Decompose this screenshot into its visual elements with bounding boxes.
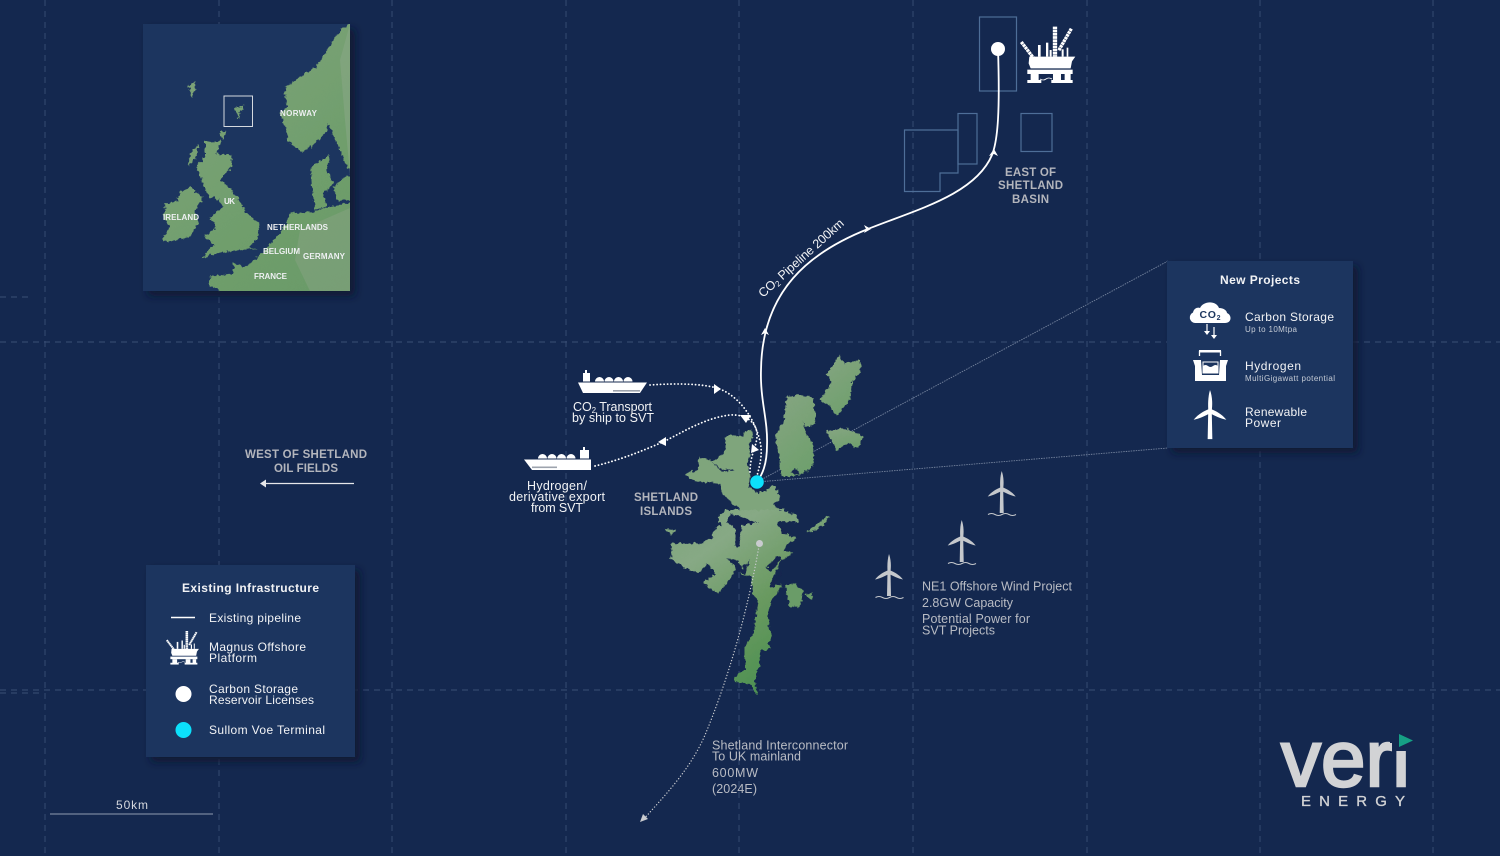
- carbon storage reservoir point: [991, 42, 1005, 56]
- label: East of Shetland Basin: BASIN: [1012, 194, 1049, 206]
- inset country labels: IRELAND: [163, 213, 199, 222]
- ship: hydrogen export: [524, 447, 591, 470]
- inset country labels: FRANCE: [254, 272, 288, 281]
- legend: reservoir licences: [176, 682, 314, 707]
- legend: reservoir licences: Carbon Storage: [209, 682, 298, 696]
- label: West of Shetland oil fields: WEST OF SHETLAND: [245, 449, 367, 461]
- inset country labels: [163, 109, 346, 281]
- interconnector route: [640, 540, 763, 822]
- licence blocks: [904, 17, 1052, 192]
- label: hydrogen export: Hydrogen/: [527, 479, 588, 493]
- route arrowheads: [658, 384, 759, 453]
- text: renewable power: [1245, 405, 1307, 430]
- label: CO2 pipeline: 2: [773, 279, 783, 289]
- label: West of Shetland oil fields: [245, 449, 367, 475]
- ship: CO2 transport: [578, 370, 647, 393]
- label: NE1 offshore wind: 2.8GW Capacity: [922, 596, 1014, 610]
- legend: reservoir licences: Reservoir Licenses: [209, 693, 314, 707]
- label: CO2 transport: Transport: [596, 400, 653, 414]
- label: Shetland Islands: ISLANDS: [640, 506, 692, 518]
- icon: CO2 cloud: CO: [1200, 309, 1216, 321]
- label: CO2 transport: [572, 400, 654, 425]
- inset land: [162, 20, 357, 293]
- label: West of Shetland oil fields: OIL FIELDS: [274, 463, 338, 475]
- legend: platform: Magnus Offshore: [209, 640, 306, 654]
- label: hydrogen export: from SVT: [531, 501, 583, 515]
- label: interconnector: (2024E): [712, 782, 757, 796]
- label: CO2 pipeline: Pipeline 200km: [773, 216, 847, 285]
- label: Shetland Islands: [634, 492, 698, 518]
- panel: inset locator map: [143, 20, 357, 293]
- label: NE1 offshore wind: [922, 580, 1073, 638]
- text: carbon storage: [1245, 310, 1334, 334]
- legend: platform: [167, 631, 306, 665]
- label: hydrogen export: [509, 479, 606, 515]
- legend heading: Existing Infrastructure: [182, 581, 319, 595]
- label: East of Shetland Basin: [998, 167, 1063, 206]
- inset country labels: GERMANY: [303, 252, 346, 261]
- scale bar: 50km: [116, 798, 148, 812]
- icon: wind turbine: [1194, 390, 1226, 439]
- label: interconnector: [712, 738, 848, 796]
- legend: terminal: [176, 722, 325, 738]
- label: NE1 offshore wind: SVT Projects: [922, 624, 995, 638]
- text: hydrogen: Hydrogen: [1245, 359, 1301, 373]
- logo: Veri Energy: ENERGY: [1301, 793, 1405, 810]
- text: hydrogen: MultiGigawatt potential: [1245, 374, 1335, 383]
- inset focus box: [224, 96, 252, 126]
- icon: CO2 cloud: [1190, 302, 1231, 339]
- label: hydrogen export: derivative export: [509, 490, 606, 504]
- logo: Veri Energy: veri: [1281, 714, 1410, 803]
- connector lines from terminal to new projects panel: [757, 261, 1168, 482]
- legend: terminal: Sullom Voe Terminal: [209, 723, 325, 737]
- label: interconnector: 600MW: [712, 766, 758, 780]
- label: NE1 offshore wind: Potential Power for: [922, 612, 1030, 626]
- shipping routes: [595, 384, 761, 476]
- panel: existing infrastructure legend: [146, 565, 355, 757]
- CO2 pipeline: [757, 49, 999, 482]
- inset country labels: NETHERLANDS: [267, 223, 329, 232]
- label: Shetland Islands: SHETLAND: [634, 492, 698, 504]
- label: CO2 transport: by ship to SVT: [572, 411, 654, 425]
- inset country labels: UK: [224, 197, 235, 206]
- inset country labels: NORWAY: [280, 109, 318, 118]
- text: renewable power: Power: [1245, 416, 1281, 430]
- label: NE1 offshore wind: NE1 Offshore Wind Project: [922, 580, 1073, 594]
- map: Shetland Islands: [664, 355, 863, 695]
- label: CO2 transport: CO: [573, 400, 592, 414]
- legend: platform: Platform: [209, 651, 257, 665]
- text: renewable power: Renewable: [1245, 405, 1307, 419]
- text: carbon storage: Carbon Storage: [1245, 310, 1334, 324]
- label: interconnector: To UK mainland: [712, 750, 801, 764]
- text: hydrogen: [1245, 359, 1335, 383]
- platform icon: [1021, 27, 1075, 83]
- icon: CO2 cloud: 2: [1217, 315, 1221, 322]
- new projects heading: New Projects: [1220, 273, 1300, 287]
- icon: hydrogen tank: [1193, 350, 1228, 381]
- offshore wind turbines: [875, 471, 1016, 598]
- label: interconnector: Shetland Interconnector: [712, 738, 848, 752]
- label: East of Shetland Basin: EAST OF: [1005, 167, 1056, 179]
- panel: new projects: [1167, 261, 1353, 448]
- label: East of Shetland Basin: SHETLAND: [998, 180, 1063, 192]
- voes: [727, 513, 793, 625]
- label: CO2 pipeline: CO: [756, 277, 779, 300]
- Sullom Voe Terminal marker: [750, 475, 764, 489]
- label: CO2 transport: 2: [592, 406, 597, 415]
- inset country labels: BELGIUM: [263, 247, 300, 256]
- text: carbon storage: Up to 10Mtpa: [1245, 325, 1298, 334]
- legend: pipeline: Existing pipeline: [209, 611, 301, 625]
- arrow: west: [260, 480, 354, 488]
